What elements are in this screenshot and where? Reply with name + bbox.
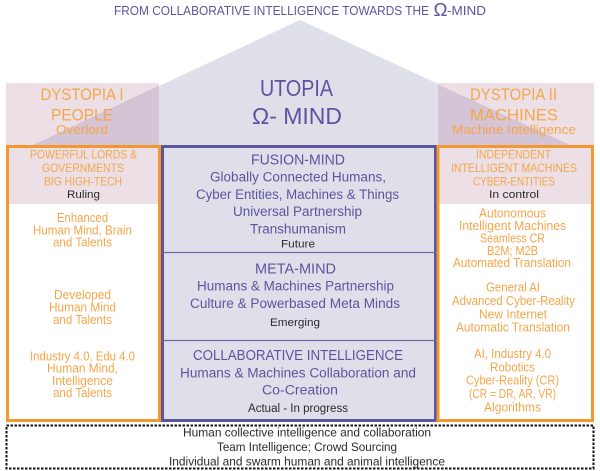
industry 4.0 human mind text: Industry 4.0, Edu 4.0 [30,349,135,363]
collaborative intelligence text: Co-Creation [262,383,338,398]
fusion-mind text [196,153,399,251]
collaborative intelligence text: Actual - In progress [248,403,348,415]
industry 4.0 human mind text: Human Mind, [47,362,118,376]
general AI text: General AI [486,281,540,295]
meta-mind text: META-MIND [255,261,336,277]
fusion-mind text: Globally Connected Humans, [210,170,386,185]
AI and robotics text: Cyber-Reality (CR) [466,374,559,388]
panel: utopia heading: Ω- MIND [252,103,342,129]
meta-mind text: Humans & Machines Partnership [197,279,394,294]
autonomous machines text [453,207,571,270]
panel: dystopia I heading: Overlord [56,122,108,137]
panel: dystopia I heading: DYSTOPIA I [40,85,124,104]
AI and robotics text: (CR = DR, AR, VR) [469,387,556,401]
in control group text [451,147,577,201]
panel: utopia heading: UTOPIA [260,75,334,101]
title [114,0,486,20]
panel: dystopia II heading [452,85,576,137]
panel: foundation dashed box: Team Intelligence; Crowd Sourcing [217,440,397,454]
autonomous machines text: Autonomous [479,207,546,221]
ruling group text: POWERFUL LORDS & [30,148,137,162]
meta-mind text [190,261,400,329]
enhanced human mind text: and Talents [53,236,112,250]
collaborative intelligence text: Humans & Machines Collaboration and [180,365,416,380]
general AI text: Automatic Translation [456,321,570,335]
autonomous machines text: Automated Translation [453,256,571,270]
collaborative intelligence text: COLLABORATIVE INTELLIGENCE [193,348,403,364]
autonomous machines text: Seamless CR [480,231,545,245]
autonomous machines text: Intelligent Machines [459,219,566,233]
in control group text: INTELLIGENT MACHINES [451,161,577,175]
AI and robotics text: AI, Industry 4.0 [474,347,551,361]
meta-mind text: Emerging [270,317,320,329]
panel: foundation dashed box [6,426,594,469]
panel: dystopia I background [6,83,159,204]
panel: dystopia II heading: Machine Intelligence [452,122,576,137]
industry 4.0 human mind text: and Talents [53,386,112,400]
title: Ω [434,0,448,20]
enhanced human mind text [33,211,132,250]
developed human mind text [49,288,116,327]
collaborative intelligence text [180,348,416,415]
general AI text [452,281,576,335]
autonomous machines text: B2M; M2B [487,244,538,258]
industry 4.0 human mind text: Intelligence [52,374,113,388]
title: FROM COLLABORATIVE INTELLIGENCE TOWARDS THE [114,3,429,18]
fusion-mind text: Transhumanism [250,221,346,236]
panel: dystopia I heading: PEOPLE [51,106,113,125]
in control group text: INDEPENDENT [476,147,552,161]
industry 4.0 human mind text [30,349,135,400]
general AI text: Advanced Cyber-Reality [452,294,576,308]
developed human mind text: Developed [54,288,111,302]
panel: dystopia II heading: DYSTOPIA II [470,85,557,104]
panel: utopia heading [252,75,342,129]
fusion-mind text: FUSION-MIND [251,153,345,169]
roof of the house [33,20,570,145]
fusion-mind text: Future [281,239,315,251]
panel: dystopia I heading [40,85,124,137]
AI and robotics text: Algorithms [484,400,541,414]
fusion-mind text: Cyber Entities, Machines & Things [196,187,399,202]
ruling group text: Ruling [67,189,100,201]
panel: dystopia II heading: MACHINES [470,106,558,125]
panel: dystopia II background [438,83,594,204]
in control group text: In control [489,189,539,201]
ruling group text [30,148,137,201]
AI and robotics text [466,347,559,414]
general AI text: New Internet [479,307,547,321]
AI and robotics text: Robotics [490,360,535,374]
ruling group text: GOVERNMENTS [42,161,124,175]
panel: foundation dashed box: Individual and swarm human and animal intelligence [169,455,445,469]
panel: center column [162,146,436,420]
developed human mind text: Human Mind [49,301,116,315]
enhanced human mind text: Human Mind, Brain [33,224,132,238]
title: -MIND [447,3,486,18]
ruling group text: BIG HIGH-TECH [44,174,122,188]
in control group text: CYBER-ENTITIES [473,174,555,188]
panel: dystopia I box [8,146,160,420]
panel: foundation dashed box: Human collective intelligence and collaboration [183,426,431,440]
panel: dystopia II box [438,146,592,420]
developed human mind text: and Talents [53,313,112,327]
enhanced human mind text: Enhanced [57,211,108,225]
meta-mind text: Culture & Powerbased Meta Minds [190,296,400,311]
fusion-mind text: Universal Partnership [233,204,362,219]
